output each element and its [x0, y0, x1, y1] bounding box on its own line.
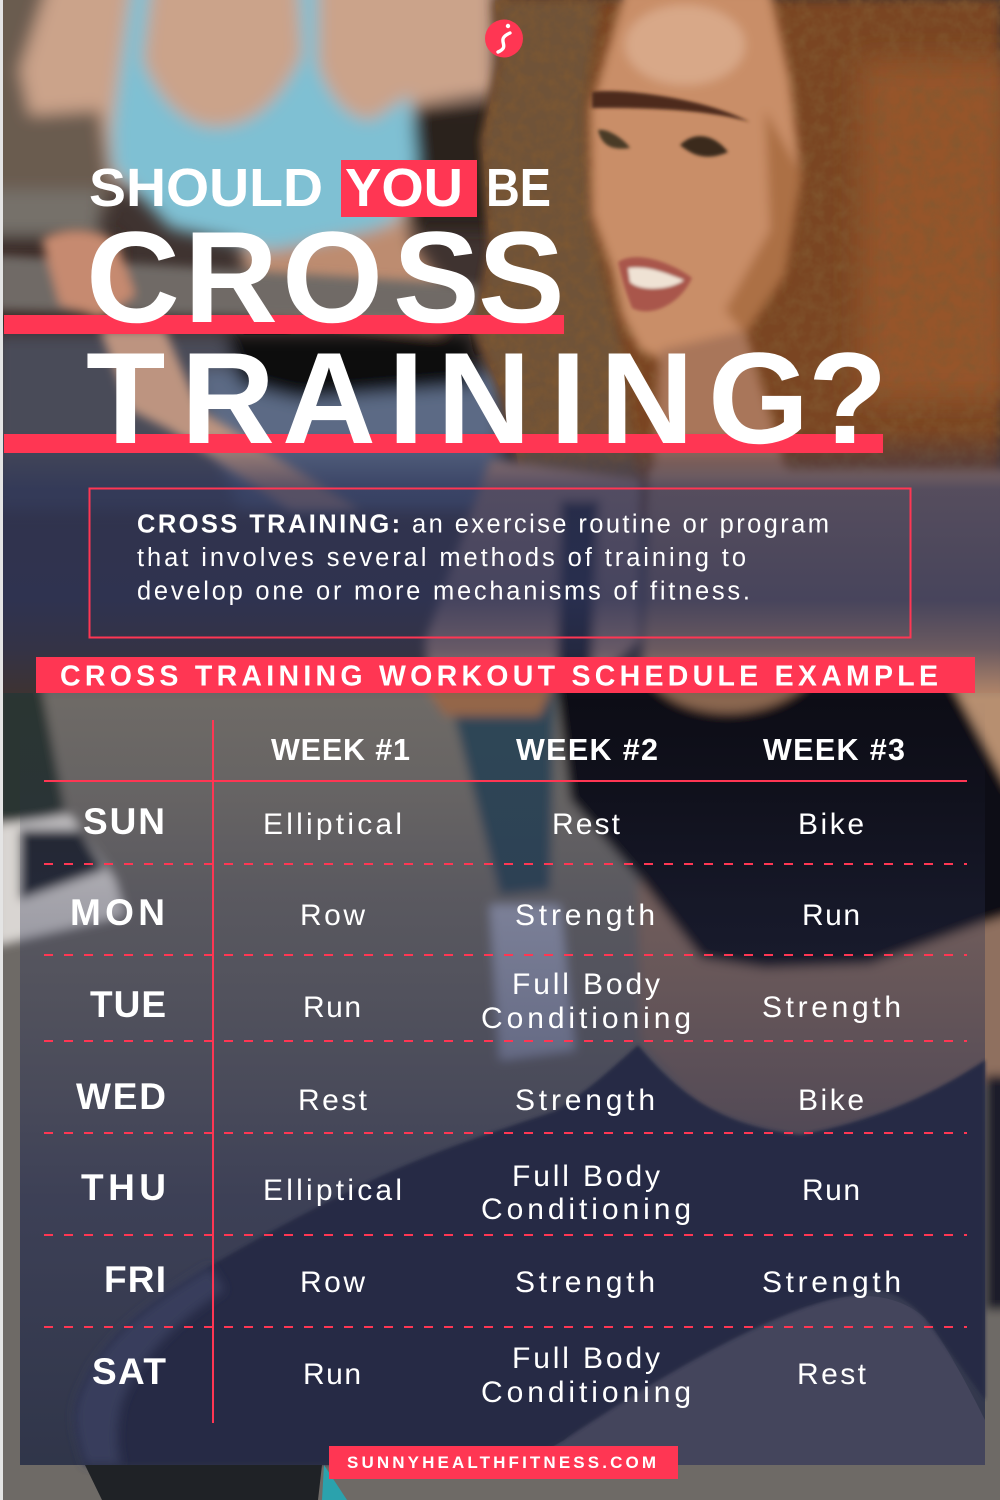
week 2 workouts [481, 808, 691, 1409]
panel overlay [20, 700, 985, 1465]
week 2 workouts: Full Body [512, 1160, 660, 1193]
week headers [271, 733, 905, 767]
lower scene: gym floor, sleeve, shoes, top [0, 680, 1000, 1500]
background athlete [0, 0, 510, 510]
title: should you be: BE [486, 158, 551, 218]
title: cross: CROSS [86, 204, 565, 350]
day labels: FRI [104, 1259, 166, 1300]
definition text: develop one or more mechanisms of fitness. [137, 578, 750, 606]
day labels: TUE [90, 984, 166, 1025]
title: should you be: SHOULD [89, 158, 323, 218]
week 2 workouts: Full Body [512, 1342, 660, 1375]
week 3 workouts: Bike [798, 1084, 864, 1117]
day labels: SUN [83, 801, 165, 842]
definition box [90, 488, 910, 638]
week 3 workouts: Strength [762, 991, 901, 1024]
footer website badge [329, 1446, 678, 1479]
title: should you be: YOU [345, 158, 463, 218]
week 1 workouts: Elliptical [263, 1174, 402, 1207]
week headers: WEEK #1 [271, 733, 410, 767]
definition text [137, 510, 829, 606]
week 1 workouts: Row [300, 1266, 365, 1299]
front leg and floor through the panel [75, 1045, 985, 1465]
week 1 workouts: Rest [298, 1084, 368, 1117]
week 2 workouts: Conditioning [481, 1002, 691, 1035]
schedule table [44, 720, 967, 1423]
definition text: CROSS TRAINING: an exercise routine or program [137, 510, 829, 538]
title [4, 158, 887, 471]
week headers: WEEK #2 [516, 733, 658, 767]
face and neck [590, 0, 802, 520]
week 3 workouts: Bike [798, 808, 864, 841]
day labels: WED [76, 1076, 166, 1117]
hair [475, 0, 1000, 520]
week 3 workouts: Strength [762, 1266, 901, 1299]
week 2 workouts: Strength [515, 899, 655, 932]
week 1 workouts: Run [303, 1358, 361, 1391]
week 1 workouts: Row [300, 899, 365, 932]
week headers: WEEK #3 [763, 733, 905, 767]
schedule heading banner: CROSS TRAINING WORKOUT SCHEDULE EXAMPLE [60, 660, 938, 692]
week 2 workouts: Rest [552, 808, 621, 841]
week 1 workouts [263, 808, 402, 1391]
day labels: THU [81, 1167, 166, 1208]
navy gradient overlay [0, 430, 1000, 700]
table grid lines [44, 720, 967, 1423]
week 2 workouts: Strength [515, 1084, 655, 1117]
week 1 workouts: Run [303, 991, 361, 1024]
logo: Sunny Health & Fitness [485, 20, 523, 58]
footer website badge: SUNNYHEALTHFITNESS.COM [347, 1453, 656, 1472]
title: YOU highlight [341, 160, 477, 217]
week 3 workouts: Rest [797, 1358, 867, 1391]
week 3 workouts: Run [802, 1174, 860, 1207]
title: red underline bars [4, 315, 883, 453]
bottom floor and shoe strip [85, 1465, 347, 1500]
week 3 workouts: Run [802, 899, 860, 932]
week 1 workouts: Elliptical [263, 808, 402, 841]
week 2 workouts: Full Body [512, 968, 660, 1001]
definition text: that involves several methods of training to [137, 544, 746, 572]
day labels: SAT [92, 1351, 166, 1392]
week 2 workouts: Conditioning [481, 1376, 691, 1409]
arm and chest under the gradient [425, 460, 1000, 720]
week 2 workouts: Conditioning [481, 1193, 691, 1226]
day labels [70, 801, 166, 1392]
week 3 workouts [762, 808, 901, 1391]
week 2 workouts: Strength [515, 1266, 655, 1299]
day labels: MON [70, 892, 165, 933]
title: should you be [89, 158, 551, 218]
title: training: TRAINING? [86, 325, 887, 471]
